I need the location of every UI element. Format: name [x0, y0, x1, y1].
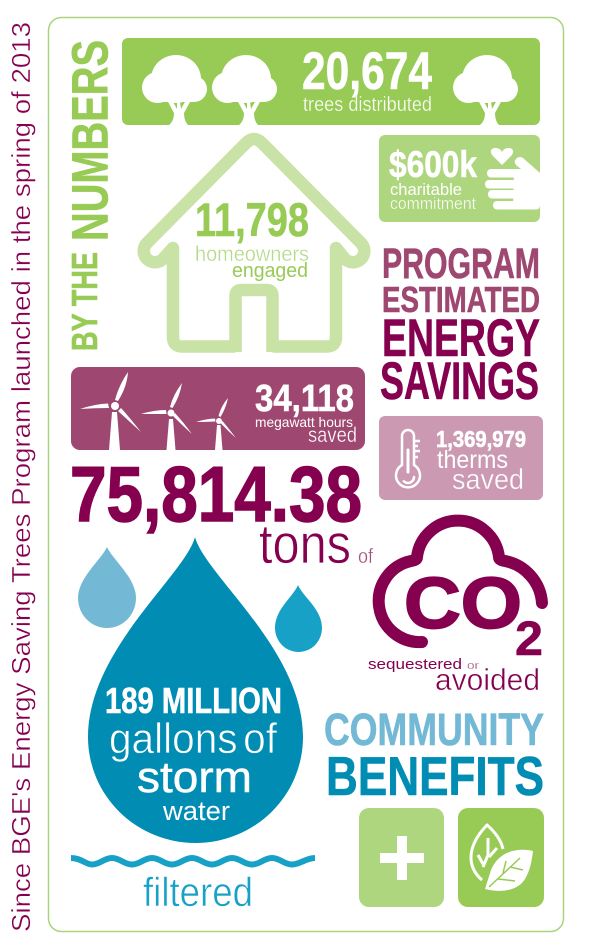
- homeowners label: homeowners: [195, 243, 309, 266]
- panel: megawatt hours saved: [71, 367, 365, 450]
- heading: community benefits: [324, 704, 544, 807]
- heading: by the numbers: BY THE: [64, 252, 105, 351]
- icon: tree one: [142, 55, 207, 125]
- icon: hand with heart: [485, 148, 540, 210]
- storm label: storm: [137, 753, 252, 802]
- trees label: trees distributed: [303, 94, 432, 116]
- icon: big water drop: [88, 537, 303, 843]
- big tons number: 75,814.38: [70, 450, 362, 538]
- therms number: 1,369,979: [436, 426, 526, 452]
- trees number: 20,674: [302, 42, 432, 101]
- heading: community benefits: COMMUNITY: [324, 704, 544, 755]
- gallons number: 189 MILLION: [105, 680, 282, 721]
- sequestered label: sequestered: [368, 656, 462, 673]
- filtered label: filtered: [143, 869, 253, 915]
- avoided label: avoided: [435, 662, 540, 697]
- panel: charitable commitment: [379, 135, 540, 222]
- icon: medium blue drop: [275, 585, 322, 652]
- icon: house outline: [144, 139, 364, 352]
- tons label: tons: [259, 512, 351, 575]
- gallons label: gallons of: [109, 715, 278, 763]
- heading: program estimated energy savings: [380, 240, 540, 411]
- panel: trees distributed: [122, 38, 540, 125]
- icon: leaves tile: [458, 808, 544, 907]
- icon: thermometer: [396, 430, 420, 487]
- megawatt saved: saved: [308, 424, 357, 447]
- panel: therms saved: [379, 416, 543, 500]
- or label: or: [467, 660, 479, 672]
- charitable label: charitable: [390, 180, 462, 199]
- heading: community benefits: BENEFITS: [326, 745, 544, 807]
- vertical side caption: Since BGE's Energy Saving Trees Program launched in the spring of 2013: [6, 22, 36, 932]
- icon: CO2 cloud: CO: [404, 564, 522, 644]
- therms label: therms: [437, 446, 508, 474]
- heading: program estimated energy savings: ENERGY: [382, 309, 540, 368]
- heading: program estimated energy savings: PROGRAM: [382, 240, 540, 288]
- engaged label: engaged: [232, 260, 308, 282]
- house number: 11,798: [195, 193, 309, 246]
- icon: plus tile: [359, 808, 444, 907]
- icon: tree three: [453, 55, 518, 125]
- icon: wind turbines: [80, 372, 236, 450]
- heading: by the numbers: [62, 40, 118, 351]
- megawatt number: 34,118: [255, 378, 354, 420]
- megawatt label: megawatt hours: [255, 414, 353, 430]
- charitable amount: $600k: [389, 144, 477, 185]
- water label: water: [162, 796, 230, 826]
- heading: program estimated energy savings: ESTIMATED: [382, 279, 540, 320]
- commitment label: commitment: [390, 194, 476, 213]
- of label: of: [358, 546, 373, 568]
- icon: water wave: [71, 858, 315, 864]
- therms saved: saved: [452, 464, 524, 496]
- icon: CO2 cloud: [379, 521, 543, 666]
- icon: CO2 cloud: 2: [515, 613, 543, 666]
- icon: tree two: [212, 55, 277, 125]
- icon: light blue drop: [78, 547, 136, 628]
